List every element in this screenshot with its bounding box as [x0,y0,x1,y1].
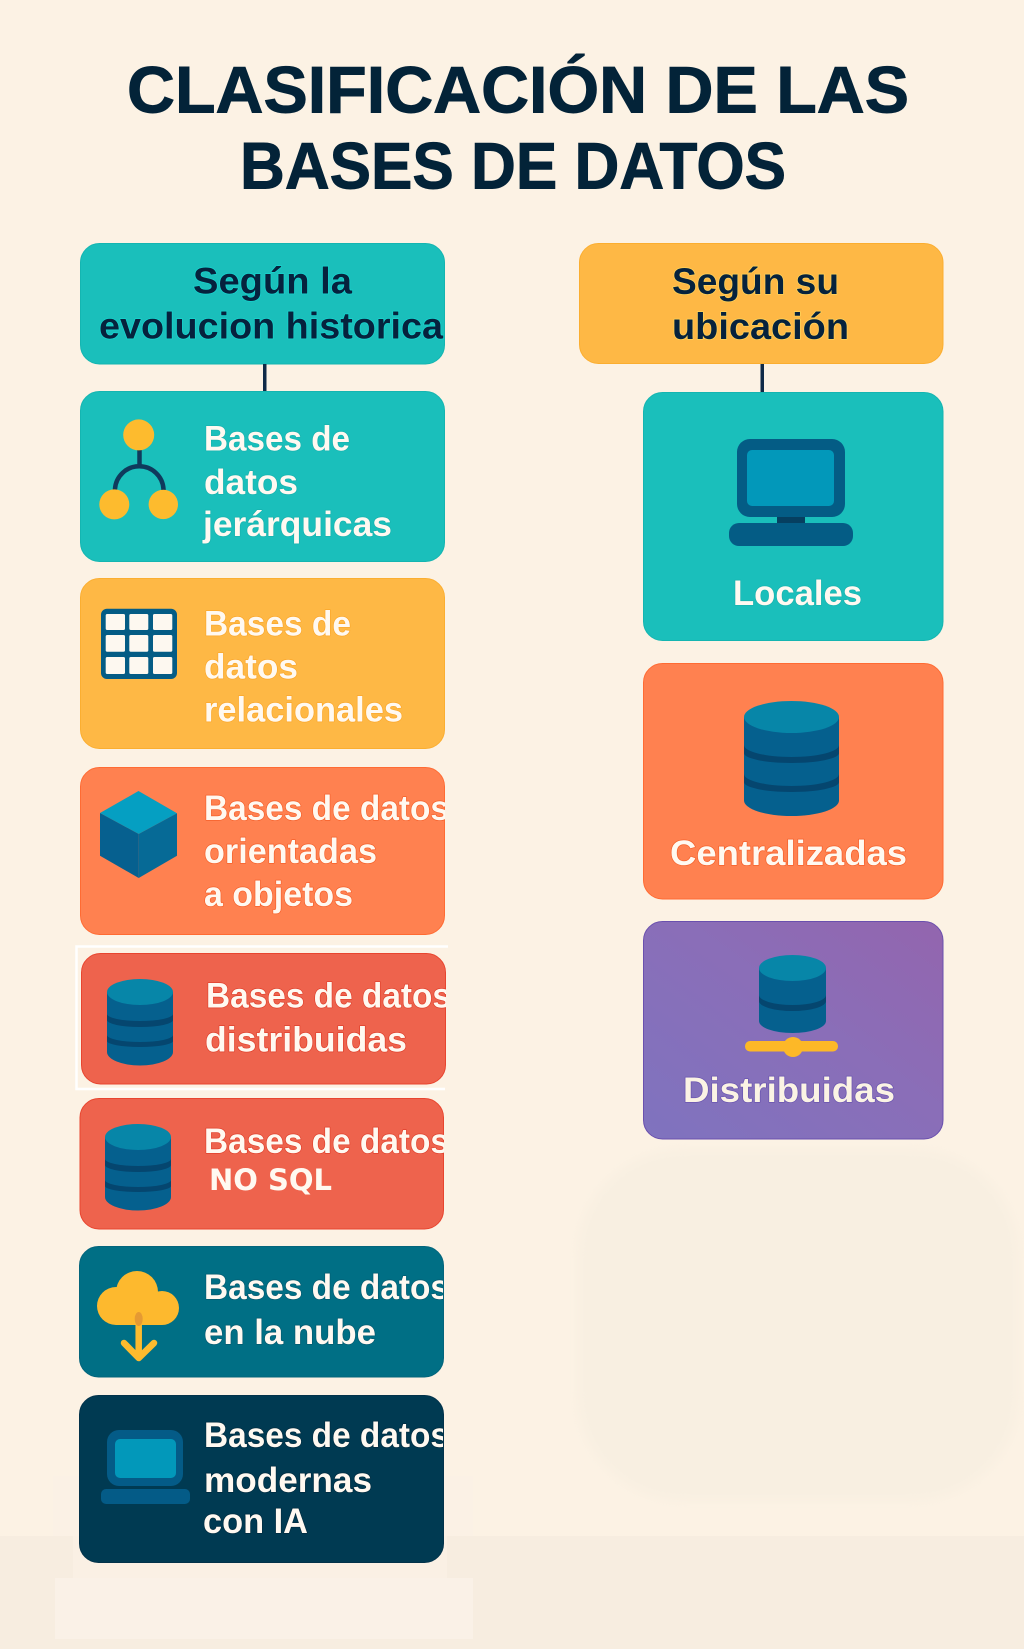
icon: networked database [745,955,838,1057]
panel: bases de datos jerárquicas: datos [204,463,298,502]
panel: right column header [580,244,943,364]
connector: right header to first card [760,364,764,392]
panel: locales: Locales [733,574,862,613]
icon: desktop computer [729,439,853,546]
panel: right column header: Según su [672,261,839,302]
icon: database [107,979,173,1066]
icon: hierarchy [99,419,178,519]
panel: bases de datos jerárquicas [80,392,444,562]
panel: bases de datos distribuidas [76,946,451,1089]
connector: left header to first card [263,364,266,391]
panel: bases de datos modernas con IA: con IA [203,1502,308,1541]
panel: bases de datos distribuidas: distribuidas [205,1020,407,1060]
panel: distribuidas: Distribuidas [683,1071,895,1110]
panel: bases de datos relacionales [80,578,444,748]
icon: database [105,1124,171,1210]
panel: bases de datos relacionales: Bases de [204,605,351,644]
panel: left column header [80,244,444,364]
panel: bases de datos NO SQL: NO SQL [209,1163,332,1197]
panel: distribuidas [644,922,943,1139]
title: BASES DE DATOS [240,128,786,202]
panel: left column header: evolucion historica [99,306,443,346]
panel: right column header: ubicación [672,306,849,347]
panel: bases de datos modernas con IA: modernas [204,1461,372,1500]
icon: database [744,701,839,816]
icon: laptop [101,1430,190,1504]
panel: left column header: Según la [193,261,352,302]
panel: bases de datos modernas con IA [80,1396,449,1562]
panel: centralizadas [644,664,943,899]
panel: bases de datos jerárquicas: Bases de [204,419,350,458]
panel: centralizadas: Centralizadas [670,834,907,873]
icon: cloud with arrow [97,1271,179,1358]
panel: bases de datos en la nube [80,1246,449,1377]
panel: bases de datos orientadas a objetos: orientadas [204,832,377,871]
panel: bases de datos jerárquicas: jerárquicas [202,505,392,544]
panel: bases de datos relacionales: relacionales [204,691,403,730]
title [127,52,909,202]
icon: cube [100,791,177,878]
panel: bases de datos orientadas a objetos [80,768,449,934]
title: CLASIFICACIÓN DE LAS [127,52,909,126]
icon: table grid [101,609,177,679]
panel: bases de datos en la nube: en la nube [204,1313,376,1352]
panel: bases de datos NO SQL [80,1098,449,1229]
panel: bases de datos orientadas a objetos: a objetos [204,875,353,914]
panel: bases de datos relacionales: datos [204,648,298,687]
panel: locales [644,392,943,640]
